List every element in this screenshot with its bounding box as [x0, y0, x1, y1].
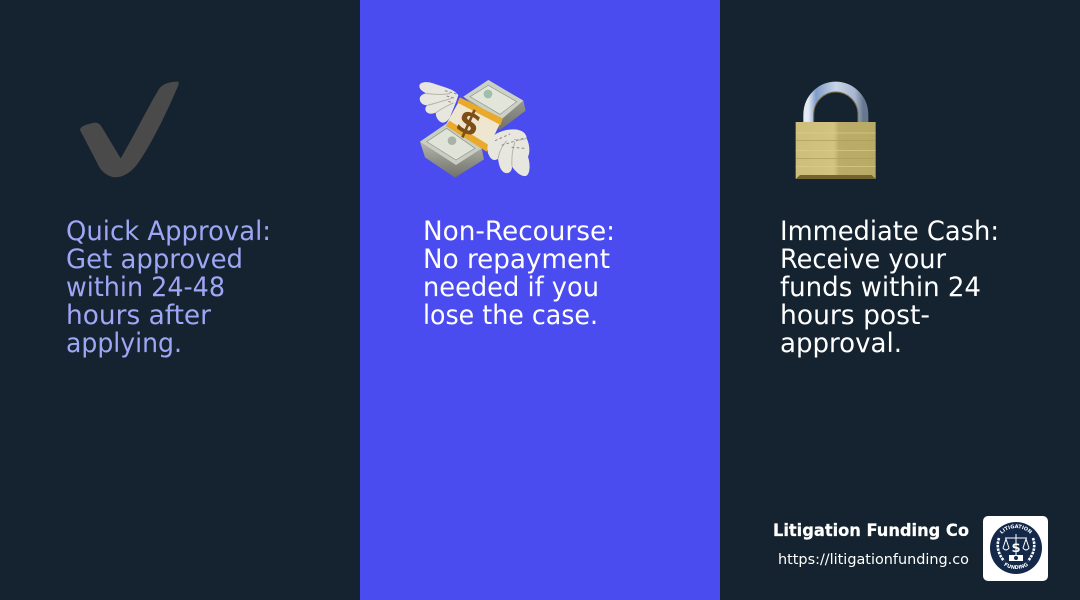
text: immediate cash: Receive your	[780, 244, 947, 275]
text: quick approval: within 24-48	[66, 272, 225, 303]
text: immediate cash: approval.	[780, 328, 902, 359]
text: quick approval	[66, 216, 271, 359]
text: immediate cash: funds within 24	[780, 272, 981, 303]
icon: dollar sign: $	[450, 100, 488, 145]
text: immediate cash	[780, 216, 999, 359]
text: non-recourse: Non-Recourse:	[423, 216, 615, 247]
icon: check mark	[80, 82, 179, 177]
panel: quick approval	[0, 0, 360, 600]
panel: immediate cash	[720, 0, 1080, 600]
icon: padlock	[796, 87, 876, 179]
footer brand	[773, 516, 1048, 581]
text: non-recourse: lose the case.	[423, 300, 598, 331]
logo: $	[1011, 541, 1021, 556]
icon: left wing	[419, 82, 458, 123]
logo: LITIGATION	[1000, 524, 1032, 534]
logo	[983, 516, 1048, 581]
text: quick approval: Get approved	[66, 244, 243, 275]
panel: non-recourse	[360, 0, 720, 600]
brand url: https://litigationfunding.co	[778, 552, 969, 568]
text: non-recourse: needed if you	[423, 272, 599, 303]
text: quick approval: applying.	[66, 328, 182, 359]
text: non-recourse: No repayment	[423, 244, 610, 275]
text: quick approval: hours after	[66, 300, 212, 331]
text: quick approval: Quick Approval:	[66, 216, 271, 247]
brand name: Litigation Funding Co	[773, 521, 969, 541]
text: immediate cash: hours post-	[780, 300, 930, 331]
logo: FUNDING	[1004, 562, 1028, 569]
text: non-recourse	[423, 216, 615, 331]
icon: money with wings	[419, 80, 530, 178]
icon: right wing	[487, 129, 530, 176]
text: immediate cash: Immediate Cash:	[780, 216, 999, 247]
